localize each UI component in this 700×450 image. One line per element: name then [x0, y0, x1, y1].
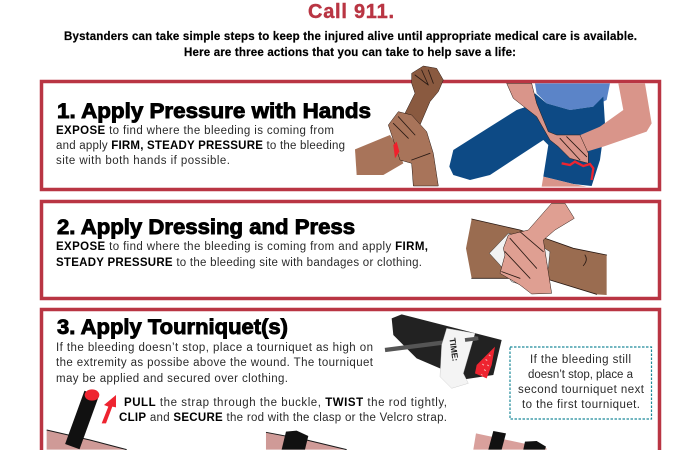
panel: step 2 frame — [42, 202, 660, 298]
illustration: leg with two tourniquets — [473, 431, 547, 450]
text: pull twist clip secure instructions — [119, 397, 447, 424]
illustration: leg with tourniquet applied — [266, 431, 347, 450]
text: step 2 instructions: STEADY PRESSURE to the bleeding site with bandages or clothing. — [56, 257, 422, 269]
panel: step 3 frame — [42, 310, 660, 450]
illustration: tourniquet device — [385, 314, 502, 388]
heading: step 2: 2. Apply Dressing and Press — [57, 215, 355, 239]
callout: second tourniquet: doesn’t stop, place a — [528, 369, 634, 381]
intro text: Here are three actions that you can take to help save a life: — [184, 47, 516, 59]
heading: step 3: 3. Apply Tourniquet(s) — [57, 315, 288, 339]
text: step 2 instructions: EXPOSE to find where the bleeding is coming from and apply FIRM, — [56, 241, 428, 253]
illustration: person pressing on leg wound — [449, 83, 652, 187]
illustration: leg with tourniquet strap pulled — [47, 389, 127, 450]
text: pull twist clip secure instructions: PULL the strap through the buckle, TWIST the rod tightly, — [124, 397, 447, 409]
text: step 3 instructions: the extremity as possibe above the wound. The tourniquet — [56, 357, 374, 369]
callout: second tourniquet: to the first tourniquet. — [522, 399, 640, 411]
text: step 1 instructions: EXPOSE to find where the bleeding is coming from — [56, 125, 334, 137]
callout: second tourniquet: If the bleeding still — [530, 354, 631, 366]
text: step 1 instructions — [56, 125, 345, 167]
text: step 2 instructions — [56, 241, 428, 269]
text: step 3 instructions — [56, 342, 374, 385]
heading: call 911: Call 911. — [308, 1, 394, 23]
text: step 1 instructions: site with both hands if possible. — [56, 155, 230, 167]
text: step 3 instructions: may be applied and secured over clothing. — [56, 373, 288, 385]
callout: second tourniquet: second tourniquet next — [518, 384, 645, 396]
text: pull twist clip secure instructions: CLIP and SECURE the rod with the clasp or the Velcro strap. — [119, 412, 447, 424]
illustration: tourniquet device: TIME: — [447, 337, 461, 362]
text: step 3 instructions: If the bleeding doesn’t stop, place a tourniquet as high on — [56, 342, 373, 354]
text: step 1 instructions: and apply FIRM, STEADY PRESSURE to the bleeding — [56, 140, 345, 152]
intro text — [64, 31, 637, 59]
panel: step 1 frame — [42, 82, 660, 190]
illustration: hand gripping wounded arm — [355, 66, 443, 186]
callout: second tourniquet — [510, 347, 652, 419]
icon: red arrow — [102, 395, 116, 423]
illustration: hands pressing dressing on arm — [466, 203, 607, 295]
heading: step 1: 1. Apply Pressure with Hands — [57, 99, 371, 123]
intro text: Bystanders can take simple steps to keep the injured alive until appropriate medical care is available. — [64, 31, 637, 43]
